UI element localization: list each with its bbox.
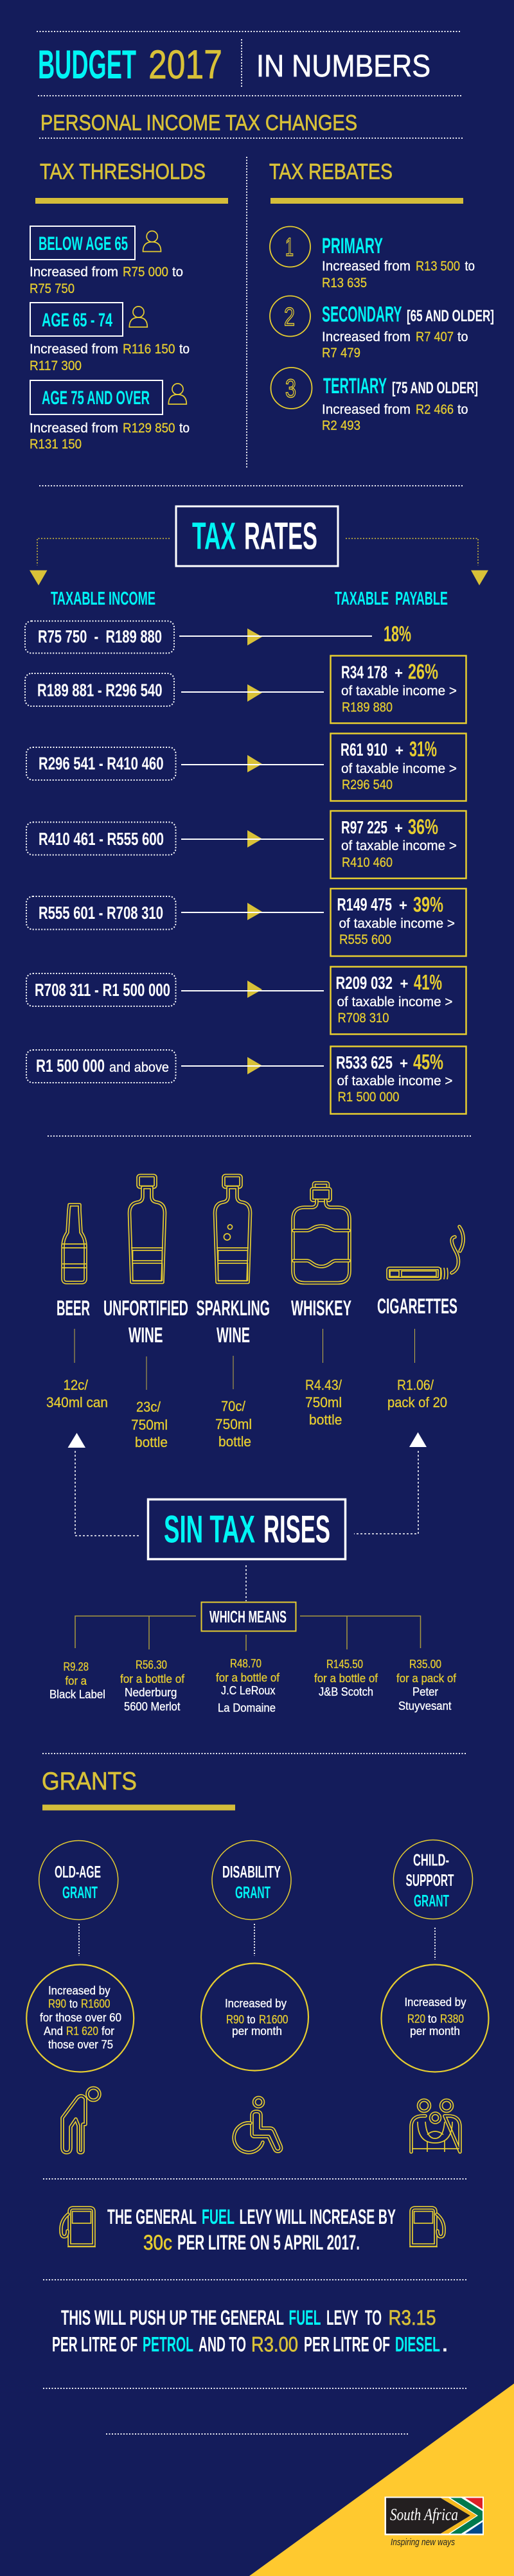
logo: South Africa: South Africa: [390, 2505, 458, 2524]
heading: sin tax rises: [148, 1500, 346, 1559]
example: black label: R9.28: [63, 1660, 89, 1673]
grant: disability: R1600: [259, 2013, 288, 2026]
item: sparkling wine: 750ml: [215, 1416, 252, 1432]
example: black label: [49, 1660, 105, 1701]
example: peter stuyvesant: Stuyvesant: [398, 1700, 451, 1712]
grant: child-support: R20: [407, 2012, 425, 2025]
rate row 7: R1 500 000: [36, 1056, 105, 1076]
item: whiskey: bottle: [309, 1412, 342, 1428]
label: which means: [202, 1603, 296, 1631]
rate row 6: of taxable income >: [337, 994, 452, 1009]
item: beer: 340ml can: [46, 1394, 108, 1410]
example: la domaine: [216, 1657, 280, 1714]
rate row 7: 45%: [413, 1050, 443, 1074]
example: j&b scotch: R145.50: [326, 1658, 363, 1671]
rebate: tertiary: Increased from: [322, 402, 411, 417]
rebate: primary: R13 635: [322, 276, 367, 290]
title: 2017: [148, 42, 222, 87]
rate row 5: R555 600: [339, 932, 391, 947]
threshold: age 65-74: R117 300: [30, 359, 82, 373]
example: j&b scotch: [314, 1658, 378, 1698]
icon: beer bottle: [62, 1205, 86, 1283]
text: petrol and diesel levy: .: [442, 2332, 448, 2356]
grant: disability: DISABILITY: [222, 1862, 281, 1881]
rate row 6: 41%: [414, 970, 442, 994]
rate row 7: R1 500 000: [338, 1089, 400, 1105]
grant: disability: to: [247, 2013, 256, 2026]
rebate: primary: PRIMARY: [322, 234, 383, 258]
icon: sparkling wine bottle: [215, 1176, 251, 1283]
threshold: below age 65: Increased from: [30, 265, 118, 280]
example: peter stuyvesant: [396, 1658, 457, 1712]
rate row 2: +: [394, 664, 403, 682]
text: petrol and diesel levy: R3.15: [388, 2306, 436, 2329]
text: petrol and diesel levy: AND TO: [199, 2332, 246, 2356]
panel: tax thresholds: [30, 159, 228, 452]
example: nederburg: [120, 1658, 185, 1713]
rebate: tertiary: [271, 368, 478, 433]
rate row 6: R708 311 - R1 500 000: [35, 980, 170, 1000]
threshold: below age 65: BELOW AGE 65: [39, 233, 128, 254]
heading: tax rebates: [269, 159, 463, 204]
rate row 7: and above: [109, 1060, 169, 1075]
rate row 6: R708 310: [338, 1010, 389, 1026]
panel: sin tax rises: [49, 1500, 457, 1714]
icon: person: [143, 231, 161, 252]
text: fuel levy increase: THE GENERAL: [107, 2205, 197, 2228]
grant: disability: Increased by: [225, 1997, 287, 2010]
rate row 2: [25, 655, 466, 724]
heading: personal income tax changes: PERSONAL INCOME TAX CHANGES: [40, 111, 357, 135]
rebate: secondary: SECONDARY: [322, 302, 402, 326]
grant: child-support: GRANT: [414, 1891, 449, 1910]
threshold: age 75 and over: AGE 75 AND OVER: [42, 387, 150, 409]
rebate: secondary: [270, 296, 494, 360]
text: fuel levy increase: [107, 2205, 396, 2254]
icon: unfortified wine bottle: [130, 1176, 164, 1283]
grant: old-age: And: [44, 2025, 63, 2038]
item: whiskey: R4.43/: [305, 1377, 342, 1393]
rate row 6: R209 032: [335, 973, 393, 993]
rate row 2: R189 881 - R296 540: [37, 680, 162, 700]
threshold: age 65-74: AGE 65 - 74: [42, 310, 112, 331]
rate row 4: R410 460: [342, 855, 393, 870]
item: unfortified wine: [103, 1296, 188, 1450]
arrow: up to cigarettes: [409, 1432, 427, 1447]
rate row 5: R555 601 - R708 310: [39, 903, 163, 923]
grant: old-age: R90: [48, 1997, 66, 2010]
title: BUDGET: [38, 42, 136, 87]
example: nederburg: 5600 Merlot: [124, 1700, 180, 1713]
rate row 3: R296 541 - R410 460: [39, 753, 163, 774]
item: whiskey: [291, 1296, 351, 1428]
heading: tax thresholds: [35, 159, 228, 204]
icon: fuel pump right: [409, 2208, 444, 2246]
grant: old-age: GRANT: [62, 1883, 98, 1902]
item: whiskey: 750ml: [305, 1394, 342, 1410]
rate row 3: +: [395, 742, 403, 759]
heading: grants: [42, 1768, 235, 1811]
rate row 3: of taxable income >: [341, 761, 457, 776]
grant: old-age: for those over 60: [40, 2011, 121, 2024]
item: sparkling wine: bottle: [218, 1434, 251, 1450]
item: unfortified wine: UNFORTIFIED: [103, 1296, 188, 1320]
grant: old-age: [26, 1840, 134, 2153]
heading: tax rates: RATES: [244, 515, 317, 558]
icon: elderly person: [62, 2088, 100, 2153]
threshold: age 75 and over: to: [179, 421, 190, 436]
rate row 4: R97 225: [341, 817, 387, 837]
rate row 3: 31%: [409, 737, 437, 761]
panel: grants: [26, 1768, 488, 2153]
rate row 3: R296 540: [342, 777, 393, 792]
grant: old-age: R1 620: [66, 2025, 98, 2038]
example: peter stuyvesant: Peter: [412, 1685, 438, 1698]
item: unfortified wine: bottle: [135, 1434, 168, 1450]
threshold: below age 65: R75 750: [30, 281, 75, 296]
title: IN NUMBERS: [256, 49, 430, 84]
arrow: up to beer: [68, 1433, 85, 1448]
text: fuel levy increase: FUEL: [202, 2205, 235, 2228]
grant: disability: GRANT: [235, 1883, 270, 1902]
rate row 5: of taxable income >: [339, 916, 455, 931]
example: la domaine: for a bottle of: [216, 1671, 280, 1684]
rate row 1: [25, 621, 411, 653]
example: la domaine: La Domaine: [218, 1701, 276, 1714]
column heading: taxable payable: TAXABLE PAYABLE: [335, 589, 448, 609]
rate row 5: +: [399, 897, 407, 914]
threshold: below age 65: R75 000: [123, 265, 168, 280]
heading: tax rates: TAX: [192, 515, 236, 558]
text: fuel levy increase: 30c: [143, 2231, 172, 2254]
text: petrol and diesel levy: PER LITRE OF: [304, 2332, 390, 2356]
title: [38, 42, 430, 87]
rate row 4: [26, 811, 466, 878]
example: black label: for a: [66, 1674, 87, 1687]
rate row 3: [26, 734, 466, 801]
item: cigarettes: CIGARETTES: [377, 1294, 457, 1318]
grant: old-age: to: [69, 1997, 78, 2010]
text: petrol and diesel levy: PETROL: [143, 2332, 193, 2356]
icon: person: [168, 384, 186, 404]
rebate: tertiary: R2 493: [322, 418, 360, 433]
item: unfortified wine: 23c/: [136, 1399, 161, 1415]
arrow: left: [30, 571, 48, 585]
grant: disability: R90: [226, 2013, 244, 2026]
text: fuel levy increase: PER LITRE ON 5 APRIL 2017.: [177, 2231, 360, 2254]
rebate: primary: 1: [285, 233, 294, 262]
panel: sin tax items: [46, 1176, 463, 1536]
item: cigarettes: R1.06/: [397, 1377, 434, 1393]
example: nederburg: R56.30: [136, 1658, 167, 1671]
text: petrol and diesel levy: THIS WILL PUSH UP THE GENERAL: [61, 2306, 284, 2329]
example: peter stuyvesant: R35.00: [409, 1658, 441, 1671]
example: la domaine: R48.70: [230, 1657, 261, 1670]
column heading: taxable income: TAXABLE INCOME: [51, 589, 155, 609]
item: sparkling wine: [197, 1296, 270, 1450]
threshold: age 65-74: R116 150: [123, 342, 175, 357]
grant: old-age: those over 75: [48, 2038, 113, 2051]
heading: tax rates: [176, 506, 338, 566]
logo: South Africa: Inspiring new ways: [391, 2537, 455, 2548]
item: beer: 12c/: [63, 1377, 89, 1393]
item: beer: [46, 1296, 108, 1410]
grant: disability: per month: [232, 2025, 282, 2038]
grant: old-age: for: [102, 2025, 114, 2038]
example: nederburg: Nederburg: [125, 1686, 177, 1699]
item: cigarettes: [377, 1294, 457, 1410]
rate row 4: 36%: [408, 815, 438, 839]
grant: child-support: R380: [440, 2012, 464, 2025]
rate row 5: R149 475: [337, 894, 392, 914]
item: beer: BEER: [57, 1296, 90, 1320]
rebate: secondary: 2: [284, 303, 295, 332]
rate row 4: +: [394, 820, 403, 837]
grant: child-support: Increased by: [405, 1996, 466, 2009]
rate row 4: R410 461 - R555 600: [39, 829, 164, 849]
example: j&b scotch: J&B Scotch: [319, 1685, 373, 1698]
rate row 1: R75 750 - R189 880: [38, 626, 162, 646]
rate row 2: R189 880: [342, 699, 393, 715]
rebate: secondary: to: [457, 330, 468, 344]
item: sparkling wine: WINE: [217, 1323, 250, 1347]
item: whiskey: WHISKEY: [291, 1296, 351, 1320]
item: unfortified wine: WINE: [128, 1323, 163, 1347]
rate row 2: 26%: [408, 659, 438, 684]
item: sparkling wine: 70c/: [221, 1398, 246, 1414]
rate row 3: R61 910: [341, 740, 387, 759]
panel: fuel levy: [52, 2205, 448, 2356]
threshold: below age 65: [30, 226, 183, 296]
rate row 6: +: [400, 975, 409, 993]
grant: child-support: CHILD-: [413, 1851, 449, 1870]
item: cigarettes: pack of 20: [387, 1394, 447, 1410]
text: petrol and diesel levy: [52, 2306, 448, 2356]
grant: child-support: [382, 1840, 488, 2152]
grant: child-support: per month: [410, 2025, 460, 2038]
text: petrol and diesel levy: FUEL: [289, 2306, 321, 2329]
text: fuel levy increase: LEVY WILL INCREASE BY: [239, 2205, 396, 2228]
heading: sin tax rises: SIN TAX: [164, 1507, 255, 1551]
threshold: age 75 and over: R131 150: [30, 437, 82, 452]
heading: sin tax rises: RISES: [263, 1507, 330, 1551]
rate row 2: R34 178: [341, 662, 387, 682]
threshold: age 65-74: [30, 303, 190, 373]
rebate: tertiary: 3: [285, 375, 296, 403]
rate row 7: +: [400, 1055, 408, 1072]
threshold: age 65-74: Increased from: [30, 342, 118, 357]
example: j&b scotch: for a bottle of: [314, 1672, 378, 1685]
threshold: age 75 and over: R129 850: [123, 421, 175, 436]
icon: family: [411, 2100, 460, 2152]
text: petrol and diesel levy: PER LITRE OF: [52, 2332, 137, 2356]
rate row 5: 39%: [413, 893, 443, 916]
rebate: primary: [270, 226, 475, 290]
grant: disability: [201, 1840, 308, 2153]
icon: cigarette: [388, 1227, 463, 1279]
rate row 7: of taxable income >: [337, 1073, 452, 1088]
label: which means: WHICH MEANS: [209, 1607, 287, 1626]
grant: child-support: to: [428, 2012, 437, 2025]
threshold: below age 65: to: [172, 265, 183, 280]
text: petrol and diesel levy: R3.00: [251, 2332, 298, 2356]
icon: whiskey bottle: [293, 1183, 350, 1283]
rate row 6: [26, 966, 466, 1035]
rebate: secondary: Increased from: [322, 330, 411, 344]
heading: tax thresholds: TAX THRESHOLDS: [40, 159, 206, 184]
example: peter stuyvesant: for a pack of: [396, 1672, 457, 1685]
grant: old-age: R1600: [81, 1997, 111, 2010]
threshold: age 75 and over: Increased from: [30, 421, 118, 436]
rate row 1: 18%: [384, 622, 411, 646]
rate row 7: R533 625: [336, 1053, 393, 1072]
rebate: primary: R13 500: [416, 259, 460, 274]
rebate: tertiary: to: [457, 402, 468, 417]
panel: tax rebates: [269, 159, 494, 433]
item: sparkling wine: SPARKLING: [197, 1296, 270, 1320]
grant: old-age: Increased by: [48, 1984, 111, 1997]
logo: South Africa: [384, 2497, 484, 2548]
corner: yellow triangle: [249, 2384, 514, 2576]
panel: tax rates: [25, 506, 488, 1114]
rebate: tertiary: TERTIARY: [323, 374, 387, 398]
rate row 2: of taxable income >: [341, 683, 457, 698]
rebate: secondary: R7 479: [322, 346, 360, 360]
example: nederburg: for a bottle of: [120, 1673, 185, 1685]
rebate: tertiary: R2 466: [416, 402, 454, 417]
example: black label: Black Label: [49, 1688, 105, 1701]
item: unfortified wine: 750ml: [131, 1417, 168, 1433]
text: petrol and diesel levy: DIESEL: [395, 2332, 440, 2356]
example: la domaine: J.C LeRoux: [221, 1684, 275, 1697]
arrow: right: [471, 571, 488, 585]
rate row 5: [26, 889, 466, 956]
grant: old-age: OLD-AGE: [55, 1862, 101, 1881]
icon: fuel pump left: [61, 2208, 96, 2246]
rebate: secondary: R7 407: [416, 330, 454, 344]
icon: wheelchair user: [234, 2097, 281, 2153]
grant: child-support: SUPPORT: [406, 1870, 454, 1890]
rebate: primary: to: [465, 259, 475, 274]
threshold: age 65-74: to: [179, 342, 190, 357]
rate row 7: [26, 1046, 466, 1114]
heading: tax rebates: TAX REBATES: [269, 159, 393, 184]
rate row 4: of taxable income >: [341, 838, 457, 853]
text: petrol and diesel levy: LEVY TO: [326, 2306, 382, 2329]
heading: grants: GRANTS: [42, 1768, 137, 1795]
threshold: age 75 and over: [30, 380, 190, 452]
rebate: primary: Increased from: [322, 259, 411, 274]
icon: person: [129, 306, 147, 327]
